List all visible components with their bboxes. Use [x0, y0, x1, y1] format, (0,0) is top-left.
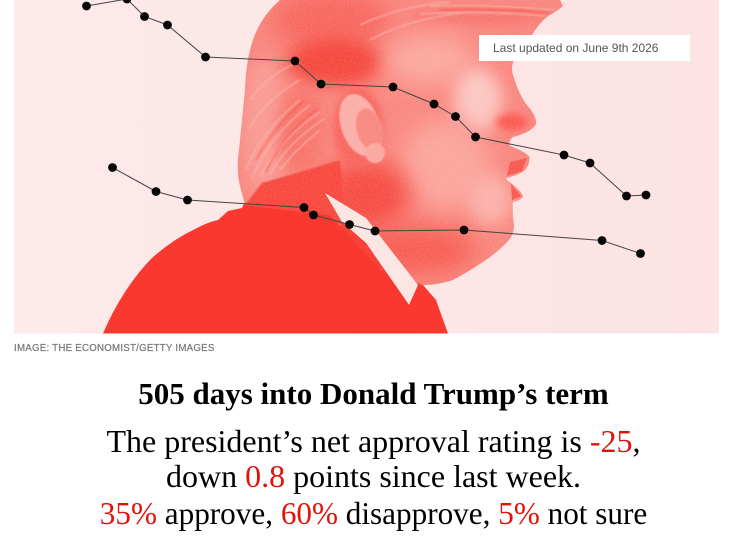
line chart: lower series [108, 163, 645, 258]
shirt collar [325, 193, 418, 305]
face shading [243, 0, 555, 274]
head and face [238, 0, 563, 285]
image credit: IMAGE: THE ECONOMIST/GETTY IMAGES [14, 343, 215, 354]
hair strands [246, 2, 555, 178]
image background [14, 0, 719, 334]
last updated label [479, 35, 690, 61]
last updated label: Last updated on June 9th 2026 [493, 41, 658, 55]
summary text [100, 423, 647, 531]
portrait silhouette [100, 0, 570, 334]
line chart: upper series [82, 0, 650, 200]
ear [332, 88, 389, 168]
film grain [238, 0, 562, 285]
summary line 3: 35% approve, 60% disapprove, 5% not sure [100, 496, 647, 530]
jacket lapel [330, 222, 418, 334]
heading: 505 days into Donald Trump’s term [138, 376, 609, 411]
summary line 1: The president’s net approval rating is -25, [106, 423, 641, 459]
summary line 2: down 0.8 points since last week. [166, 458, 581, 494]
suit and shoulders [103, 185, 448, 334]
panel: illustration of Donald Trump with line chart overlay [14, 0, 719, 334]
